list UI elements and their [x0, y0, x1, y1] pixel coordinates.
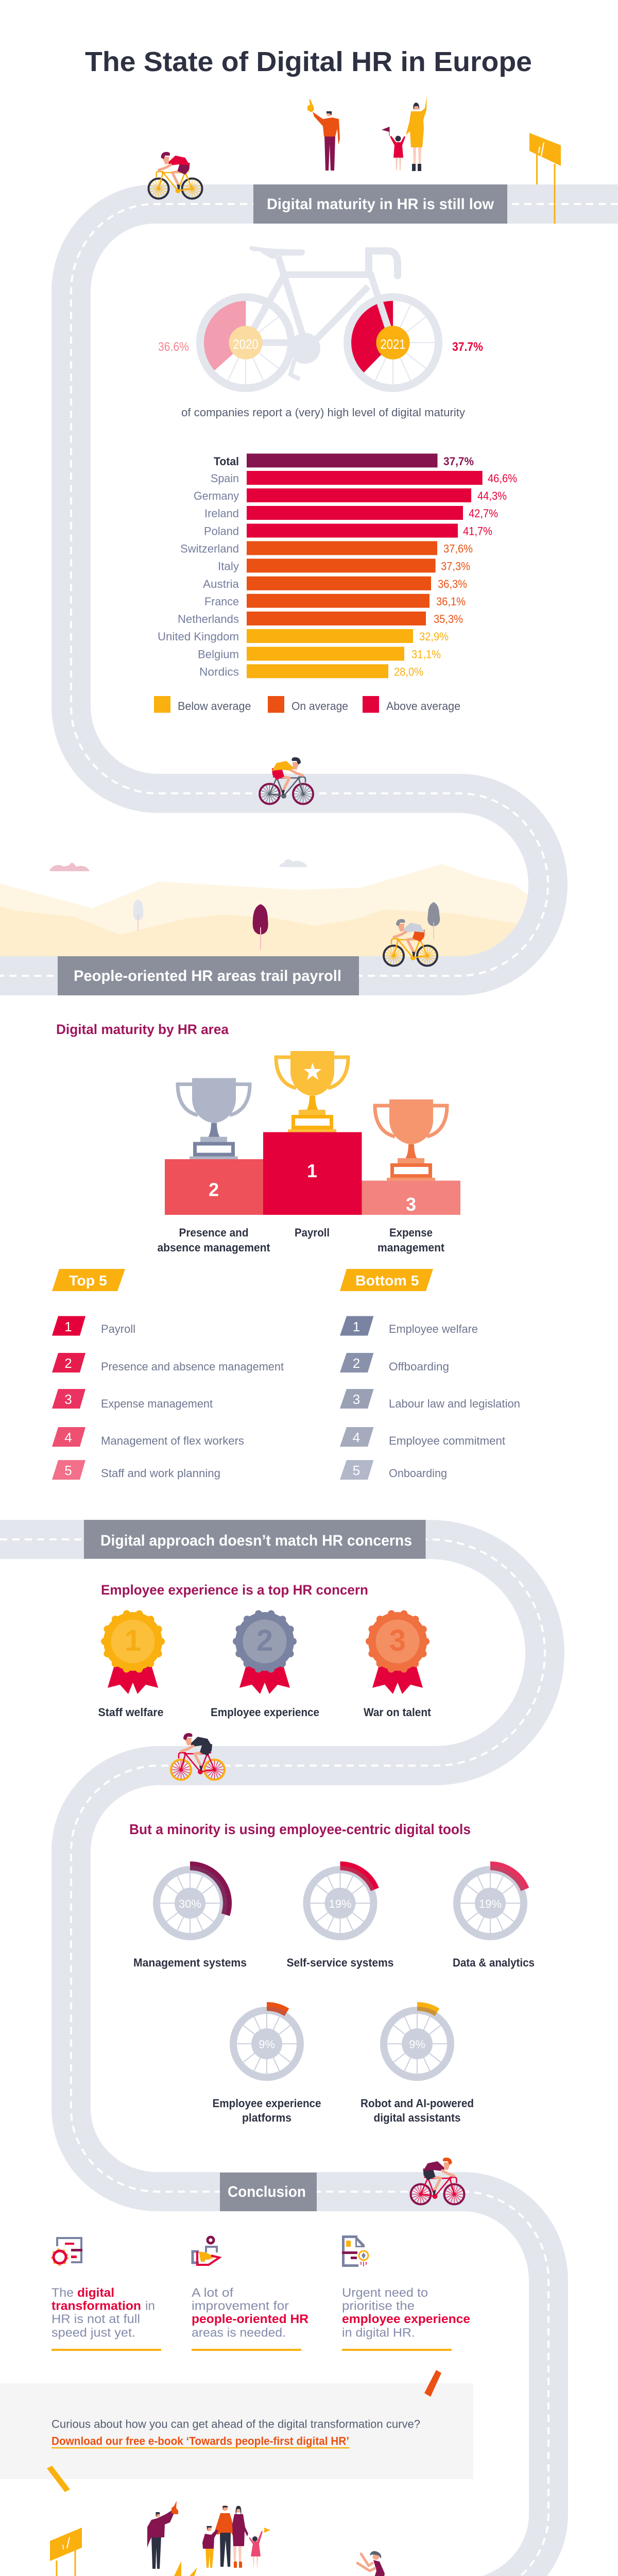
bar chart: countries: 44,3%: [477, 489, 507, 502]
bar chart: countries: Nordics: [199, 666, 239, 678]
list: top 5: Top 5: [69, 1273, 107, 1289]
list: top 5: 2: [64, 1355, 72, 1371]
finish sign: [50, 2528, 82, 2576]
conclusion text: people-oriented areas: improvement for: [192, 2299, 289, 2313]
conclusion text: people-oriented areas: people-oriented HR: [192, 2312, 308, 2326]
confetti: yellow stick: [47, 2466, 70, 2492]
caption: digital maturity: of companies report a (very) high level of digital maturity: [181, 406, 465, 419]
medals: War on talent: [364, 1706, 432, 1719]
cyclist: purple jersey: [411, 2158, 465, 2204]
header: digital maturity: [253, 184, 507, 224]
bar chart: countries: 28,0%: [394, 666, 423, 678]
road: first stretch: [0, 204, 618, 976]
cyclist: waving, orange wheels: [341, 2551, 394, 2576]
bar chart: countries: 36,1%: [436, 595, 466, 608]
title: The State of Digital HR in Europe: [85, 46, 532, 77]
cyclist: gray jersey: [384, 919, 437, 965]
bar chart: countries: Ireland: [204, 507, 239, 520]
header: digital maturity: Digital maturity in HR is still low: [267, 196, 494, 213]
medals: 3: [389, 1624, 406, 1657]
bar chart: countries: 46,6%: [488, 472, 517, 485]
wheel chart: employee experience platforms 9%: platforms: [242, 2111, 291, 2124]
wheel chart: data and analytics 19%: Data & analytics: [453, 1956, 535, 1969]
list: top 5: 5: [64, 1463, 72, 1478]
list: top 5: Presence and absence management: [101, 1360, 284, 1373]
bar chart: countries: Switzerland: [180, 542, 239, 555]
bar chart: countries: Total: [214, 455, 239, 468]
landscape with hills, clouds and trees: [0, 859, 548, 969]
list: bottom 5: Employee commitment: [389, 1434, 505, 1447]
icon: document and badge: [342, 2235, 368, 2266]
wheel chart: data and analytics 19%: 19%: [479, 1897, 502, 1910]
bar chart: countries: 36,3%: [438, 578, 467, 590]
icon: person with hand: [193, 2237, 219, 2265]
list: bottom 5: 1: [353, 1319, 360, 1334]
bar chart: countries: Poland: [204, 524, 239, 538]
legend: On average: [291, 700, 348, 713]
bar chart: countries: Belgium: [198, 648, 239, 660]
header: digital approach: Digital approach doesn’t match HR concerns: [100, 1532, 412, 1549]
spectators: family with flag: [202, 2505, 270, 2568]
bar chart: countries: 37,3%: [441, 560, 470, 573]
wheel chart: robot and AI assistants 9%: Robot and AI-powered: [360, 2097, 474, 2110]
confetti: orange stick: [424, 2370, 441, 2397]
conclusion text: digital transformation: transformation: [52, 2299, 141, 2313]
wheel chart: robot and AI assistants 9%: [360, 2006, 474, 2124]
spectator: man with foam hand: [307, 99, 340, 171]
bar chart: countries: France: [204, 595, 239, 608]
bar chart: countries: [158, 453, 517, 678]
cyclist: gray bike, yellow jersey: [260, 757, 313, 804]
heading: employee experience: Employee experience is a top HR concern: [101, 1582, 368, 1598]
wheel chart: self-service systems 19%: [286, 1866, 393, 1969]
call to action panel: Download our free e-book ‘Towards people-first digital HR’: [52, 2435, 349, 2447]
bar chart: countries: 35,3%: [434, 613, 463, 625]
bicycle chart: 2020 vs 2021: [158, 246, 483, 388]
cheering woman on the road: [161, 2561, 197, 2576]
wheel chart: employee experience platforms 9%: Employee experience: [212, 2097, 321, 2110]
bar chart: countries: Germany: [194, 489, 239, 502]
conclusion text: digital transformation: speed just yet.: [52, 2326, 135, 2340]
list: top 5: Staff and work planning: [101, 1467, 220, 1480]
podium with trophies: Expense: [389, 1226, 433, 1239]
bicycle chart: 2020 vs 2021: 2021: [380, 336, 406, 352]
list: top 5: Expense management: [101, 1397, 213, 1410]
list: top 5: 1: [64, 1319, 72, 1334]
podium with trophies: [158, 1051, 460, 1254]
call to action panel: [0, 2383, 473, 2479]
bar chart: countries: Spain: [211, 472, 239, 485]
list: top 5: Management of flex workers: [101, 1434, 244, 1447]
medals: 1: [125, 1624, 141, 1657]
wheel chart: robot and AI assistants 9%: digital assistants: [374, 2111, 460, 2124]
icon: gear and document: [52, 2238, 82, 2265]
header: people-oriented: [58, 956, 359, 995]
header: digital approach: [84, 1520, 425, 1559]
wheel chart: employee experience platforms 9%: 9%: [259, 2038, 275, 2050]
list: bottom 5: Offboarding: [389, 1360, 449, 1373]
list: top 5: 3: [64, 1392, 72, 1407]
spectators: woman and child with flag: [382, 96, 427, 171]
conclusion text: employee experience: in digital HR.: [342, 2326, 415, 2340]
conclusion text: people-oriented areas: areas is needed.: [192, 2326, 286, 2340]
podium with trophies: 2: [209, 1179, 219, 1200]
podium with trophies: Presence and: [179, 1226, 248, 1239]
conclusion text: employee experience: employee experience: [342, 2312, 470, 2326]
conclusion text: digital transformation: HR is not at full: [52, 2312, 140, 2326]
list: bottom 5: Bottom 5: [355, 1273, 419, 1289]
bar chart: countries: 32,9%: [419, 630, 449, 643]
conclusion text: digital transformation: The: [52, 2286, 74, 2300]
medals: [98, 1612, 432, 1719]
sign post passing over road: [554, 184, 555, 224]
header: people-oriented: People-oriented HR areas trail payroll: [74, 968, 341, 985]
medals: 2: [256, 1624, 273, 1657]
header: conclusion: Conclusion: [228, 2183, 306, 2200]
wheel chart: management systems 30%: [133, 1866, 247, 1969]
wheel chart: data and analytics 19%: [453, 1866, 535, 1969]
podium with trophies: management: [377, 1241, 445, 1254]
header: conclusion: [220, 2173, 317, 2211]
road: second stretch: [0, 1539, 548, 2576]
medals: Employee experience: [211, 1706, 319, 1719]
list: bottom 5: 5: [353, 1463, 360, 1478]
podium with trophies: Payroll: [295, 1226, 330, 1239]
list: top 5: Payroll: [101, 1323, 135, 1335]
podium with trophies: 1: [307, 1160, 317, 1181]
bar chart: countries: Italy: [218, 560, 239, 573]
bar chart: countries: 41,7%: [463, 524, 492, 538]
list: top 5: [52, 1269, 284, 1480]
list: bottom 5: Employee welfare: [389, 1323, 478, 1335]
legend: Below average: [178, 700, 251, 713]
bar chart: countries: 42,7%: [469, 507, 498, 520]
heading: digital maturity by HR area: Digital maturity by HR area: [56, 1022, 229, 1037]
legend: Above average: [386, 700, 460, 713]
wheel chart: self-service systems 19%: 19%: [329, 1897, 352, 1910]
bar chart: countries: 37,6%: [443, 542, 473, 555]
conclusion text: digital transformation: digital: [77, 2286, 114, 2300]
bicycle chart: 2020 vs 2021: 37.7%: [452, 340, 483, 354]
bar chart: countries: 31,1%: [411, 648, 441, 660]
bar chart: countries: Austria: [203, 578, 239, 590]
medals: Staff welfare: [98, 1706, 164, 1719]
bar chart: countries: 37,7%: [443, 455, 474, 468]
wheel chart: employee experience platforms 9%: [212, 2006, 321, 2124]
list: bottom 5: 2: [353, 1355, 360, 1371]
conclusion text: digital transformation: [52, 2286, 161, 2351]
wheel chart: management systems 30%: Management systems: [133, 1956, 247, 1969]
list: bottom 5: Labour law and legislation: [389, 1397, 520, 1410]
conclusion text: employee experience: prioritise the: [342, 2299, 415, 2313]
list: bottom 5: 4: [353, 1430, 360, 1445]
list: bottom 5: [340, 1269, 520, 1480]
conclusion text: people-oriented areas: A lot of: [192, 2286, 233, 2300]
cyclist: red bike, black jersey: [171, 1733, 225, 1780]
wheel chart: self-service systems 19%: Self-service systems: [286, 1956, 393, 1969]
call to action panel: Curious about how you can get ahead of the digital transformation curve?: [52, 2417, 420, 2431]
list: bottom 5: 3: [353, 1392, 360, 1407]
cyclist: yellow bike: [148, 152, 202, 199]
bicycle chart: 2020 vs 2021: 2020: [233, 336, 259, 352]
start sign: [529, 133, 561, 223]
bicycle chart: 2020 vs 2021: 36.6%: [158, 340, 189, 354]
spectator: man with orange foam hand: [147, 2501, 178, 2569]
conclusion text: people-oriented areas: [192, 2286, 308, 2351]
wheel chart: management systems 30%: 30%: [179, 1897, 201, 1910]
conclusion text: employee experience: Urgent need to: [342, 2286, 428, 2300]
conclusion text: digital transformation: in: [145, 2299, 155, 2313]
legend: [154, 696, 460, 713]
podium with trophies: absence management: [158, 1241, 270, 1254]
heading: employee-centric tools: But a minority is using employee-centric digital tools: [129, 1821, 471, 1837]
list: bottom 5: Onboarding: [389, 1467, 447, 1480]
podium with trophies: 3: [406, 1194, 416, 1215]
wheel chart: robot and AI assistants 9%: 9%: [409, 2038, 425, 2050]
bar chart: countries: United Kingdom: [158, 630, 239, 643]
bar chart: countries: Netherlands: [178, 613, 239, 625]
list: top 5: 4: [64, 1430, 72, 1445]
conclusion text: employee experience: [342, 2286, 470, 2351]
